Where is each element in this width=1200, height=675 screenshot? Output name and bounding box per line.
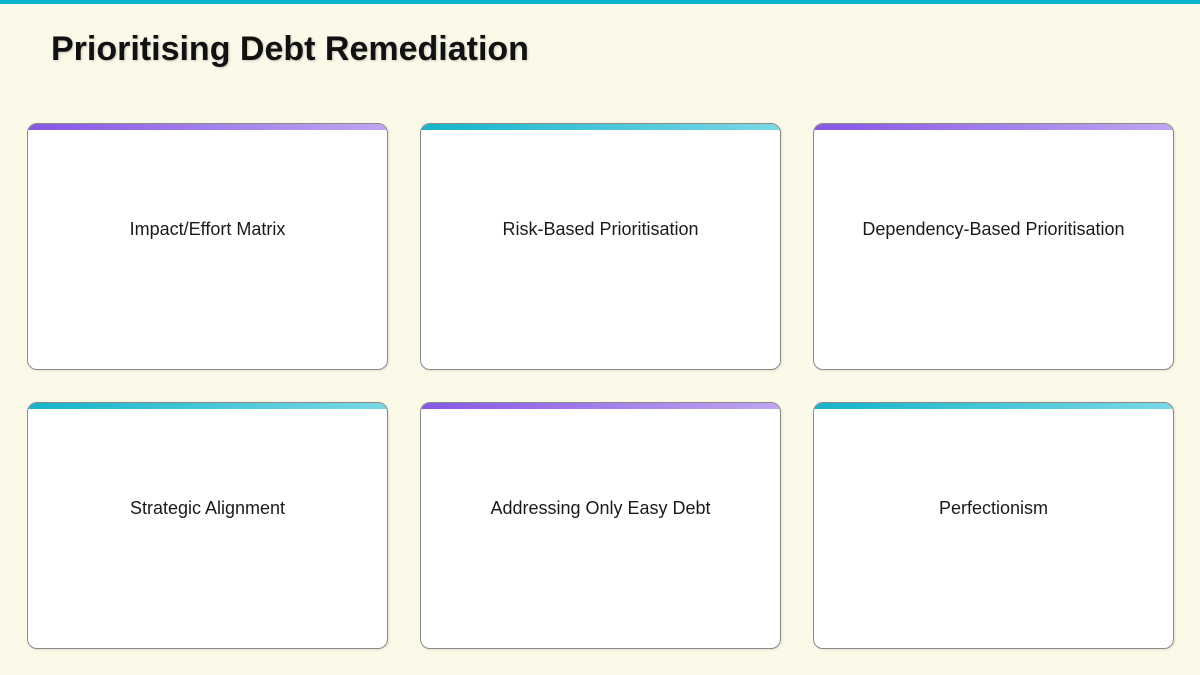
panel: perfectionism — [813, 402, 1174, 649]
panel: strategic alignment — [27, 402, 388, 649]
title: Prioritising Debt Remediation — [51, 30, 529, 68]
panel: impact/effort matrix: Impact/Effort Matrix — [130, 219, 285, 239]
panel: easy debt — [420, 402, 781, 649]
panel: easy debt: Addressing Only Easy Debt — [490, 498, 711, 518]
panel: risk-based — [420, 123, 781, 370]
panel: risk-based: Risk-Based Prioritisation — [502, 219, 699, 239]
panel: dependency-based — [813, 123, 1174, 370]
panel: dependency-based: Dependency-Based Prioritisation — [862, 219, 1125, 239]
panel: impact/effort matrix — [27, 123, 388, 370]
panel: perfectionism: Perfectionism — [939, 498, 1048, 518]
panel: strategic alignment: Strategic Alignment — [130, 498, 285, 518]
